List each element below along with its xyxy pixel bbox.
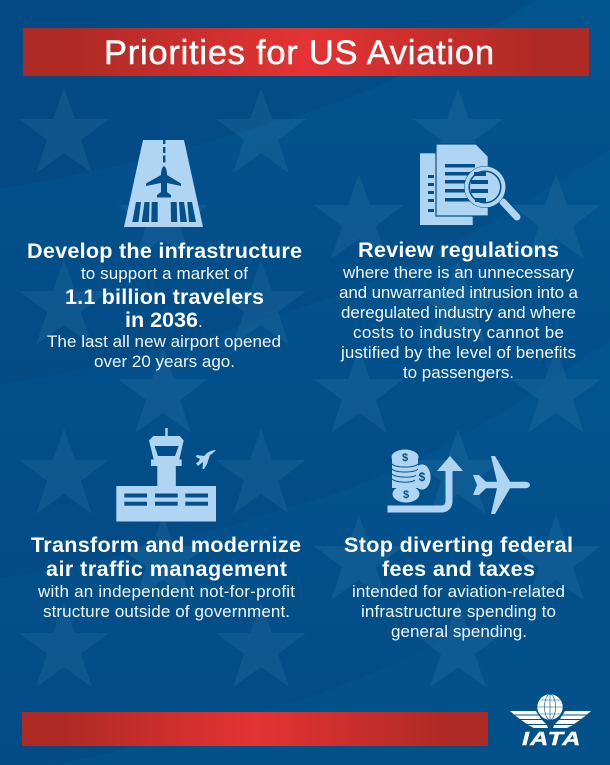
panel: stop diverting fees — [344, 450, 573, 641]
logo: IATA: IATA — [522, 728, 580, 749]
figure: 1.1 billion travelers: 1.1 billion travelers — [65, 284, 264, 309]
footer red bar — [22, 712, 488, 746]
text: independent structure: with an independent not-for-profit — [37, 582, 295, 601]
text: regulations body: deregulated industry and where — [341, 303, 576, 322]
heading: stop diverting federal: Stop diverting federal — [344, 532, 573, 557]
heading: review regulations: Review regulations — [358, 237, 559, 262]
logo: IATA — [510, 694, 591, 749]
text: general spending: intended for aviation-related — [352, 582, 565, 601]
heading: fees and taxes: fees and taxes — [382, 556, 535, 581]
text: independent structure — [37, 582, 295, 621]
text: regulations body — [339, 263, 579, 382]
text: regulations body: justified by the level of benefits — [340, 343, 576, 362]
text: regulations body: costs to industry cannot be — [353, 323, 564, 342]
icon: runway with plane — [124, 140, 203, 227]
text: general spending: infrastructure spending to — [361, 602, 556, 621]
text: regulations body: and unwarranted intrusion into a — [339, 283, 579, 302]
text: last airport line two: over 20 years ago. — [94, 352, 235, 371]
heading: air traffic management: air traffic management — [46, 556, 287, 581]
icon: control tower and plane — [116, 428, 216, 522]
text: market of: to support a market of — [81, 264, 248, 283]
icon: coins, arrow and plane: $ — [402, 452, 408, 464]
text: last airport line one: The last all new airport opened — [47, 332, 281, 351]
panel: review regulations — [339, 143, 579, 382]
text: regulations body: to passengers. — [403, 363, 514, 382]
title banner — [23, 28, 589, 76]
icon: coins, arrow and plane — [388, 450, 530, 514]
title banner: Priorities for US Aviation — [104, 34, 494, 72]
panel: air traffic management — [31, 428, 301, 621]
heading: develop the infrastructure: Develop the infrastructure — [27, 238, 302, 263]
icon: coins, arrow and plane: $ — [419, 470, 426, 484]
heading: transform and modernize: Transform and modernize — [31, 532, 301, 557]
text: regulations body: where there is an unnecessary — [342, 263, 574, 282]
figure: in 2036: in 2036 — [125, 307, 198, 332]
icon: documents and magnifier — [420, 143, 517, 225]
text: general spending: general spending. — [391, 622, 527, 641]
icon: coins, arrow and plane: $ — [403, 489, 409, 501]
text: general spending — [352, 582, 565, 641]
full stop: . — [198, 312, 203, 331]
panel: develop the infrastructure — [27, 140, 302, 371]
text: independent structure: structure outside of government. — [43, 602, 290, 621]
